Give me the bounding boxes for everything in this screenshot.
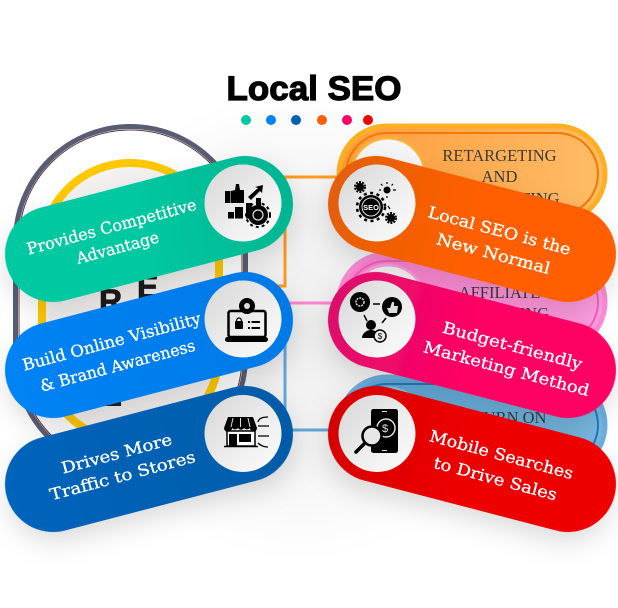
connector lines — [268, 177, 340, 430]
icon: budget flow: $ — [378, 332, 383, 341]
colour dots — [241, 115, 373, 125]
label: to Drive Sales — [432, 453, 559, 504]
icon: thumbs up, chart and badge — [225, 184, 270, 227]
background panel: left outlined capsule — [16, 126, 246, 472]
panel: build online visibility — [0, 261, 304, 429]
panel: mobile searches — [317, 375, 618, 543]
background panel: yellow capsule: E — [137, 269, 158, 305]
icon: laptop with eye — [225, 298, 268, 342]
label — [421, 318, 591, 400]
panel: provides competitive advantage — [0, 145, 304, 313]
icon: seo gear — [355, 182, 396, 223]
panel: budget-friendly marketing — [317, 261, 618, 429]
label — [426, 202, 573, 278]
label: & Brand Awareness — [38, 336, 197, 396]
label: Build Online Visibility — [20, 309, 203, 375]
background card: affiliate: MARKETING — [450, 304, 549, 323]
label: Marketing Method — [421, 337, 591, 400]
icon: phone and magnifier: $ — [382, 423, 388, 435]
background card: affiliate — [339, 254, 605, 350]
background glow — [0, 85, 618, 565]
panel: drives more traffic — [0, 375, 304, 543]
label — [427, 426, 575, 504]
label — [48, 430, 197, 504]
icon: seo gear: SEO — [363, 203, 379, 212]
label: Mobile Searches — [427, 426, 575, 483]
panel: local seo is the new normal — [317, 145, 618, 313]
background card: return on: RETURN ON — [453, 408, 547, 427]
label: Budget-friendly — [440, 318, 584, 373]
icon: storefront with arrows — [224, 417, 269, 447]
icon: budget flow — [350, 292, 402, 342]
background panel: yellow capsule — [42, 163, 219, 441]
label: New Normal — [434, 229, 552, 278]
background card: affiliate: AFFILIATE — [459, 283, 540, 302]
label: Local SEO is the — [426, 202, 573, 259]
label: Traffic to Stores — [48, 447, 197, 504]
background card: retargeting: REMARKETING — [439, 189, 560, 208]
background card: retargeting: AND — [482, 167, 517, 186]
background card: retargeting: RETARGETING — [442, 146, 557, 165]
icon: phone and magnifier — [356, 409, 398, 453]
background panel: yellow capsule: R — [99, 283, 122, 319]
background card: retargeting — [339, 126, 605, 222]
label: Provides Competitive — [25, 195, 199, 259]
label: Advantage — [73, 228, 161, 268]
title: Local SEO — [226, 70, 402, 108]
background card: return on — [339, 377, 605, 473]
label: Drives More — [59, 430, 174, 478]
